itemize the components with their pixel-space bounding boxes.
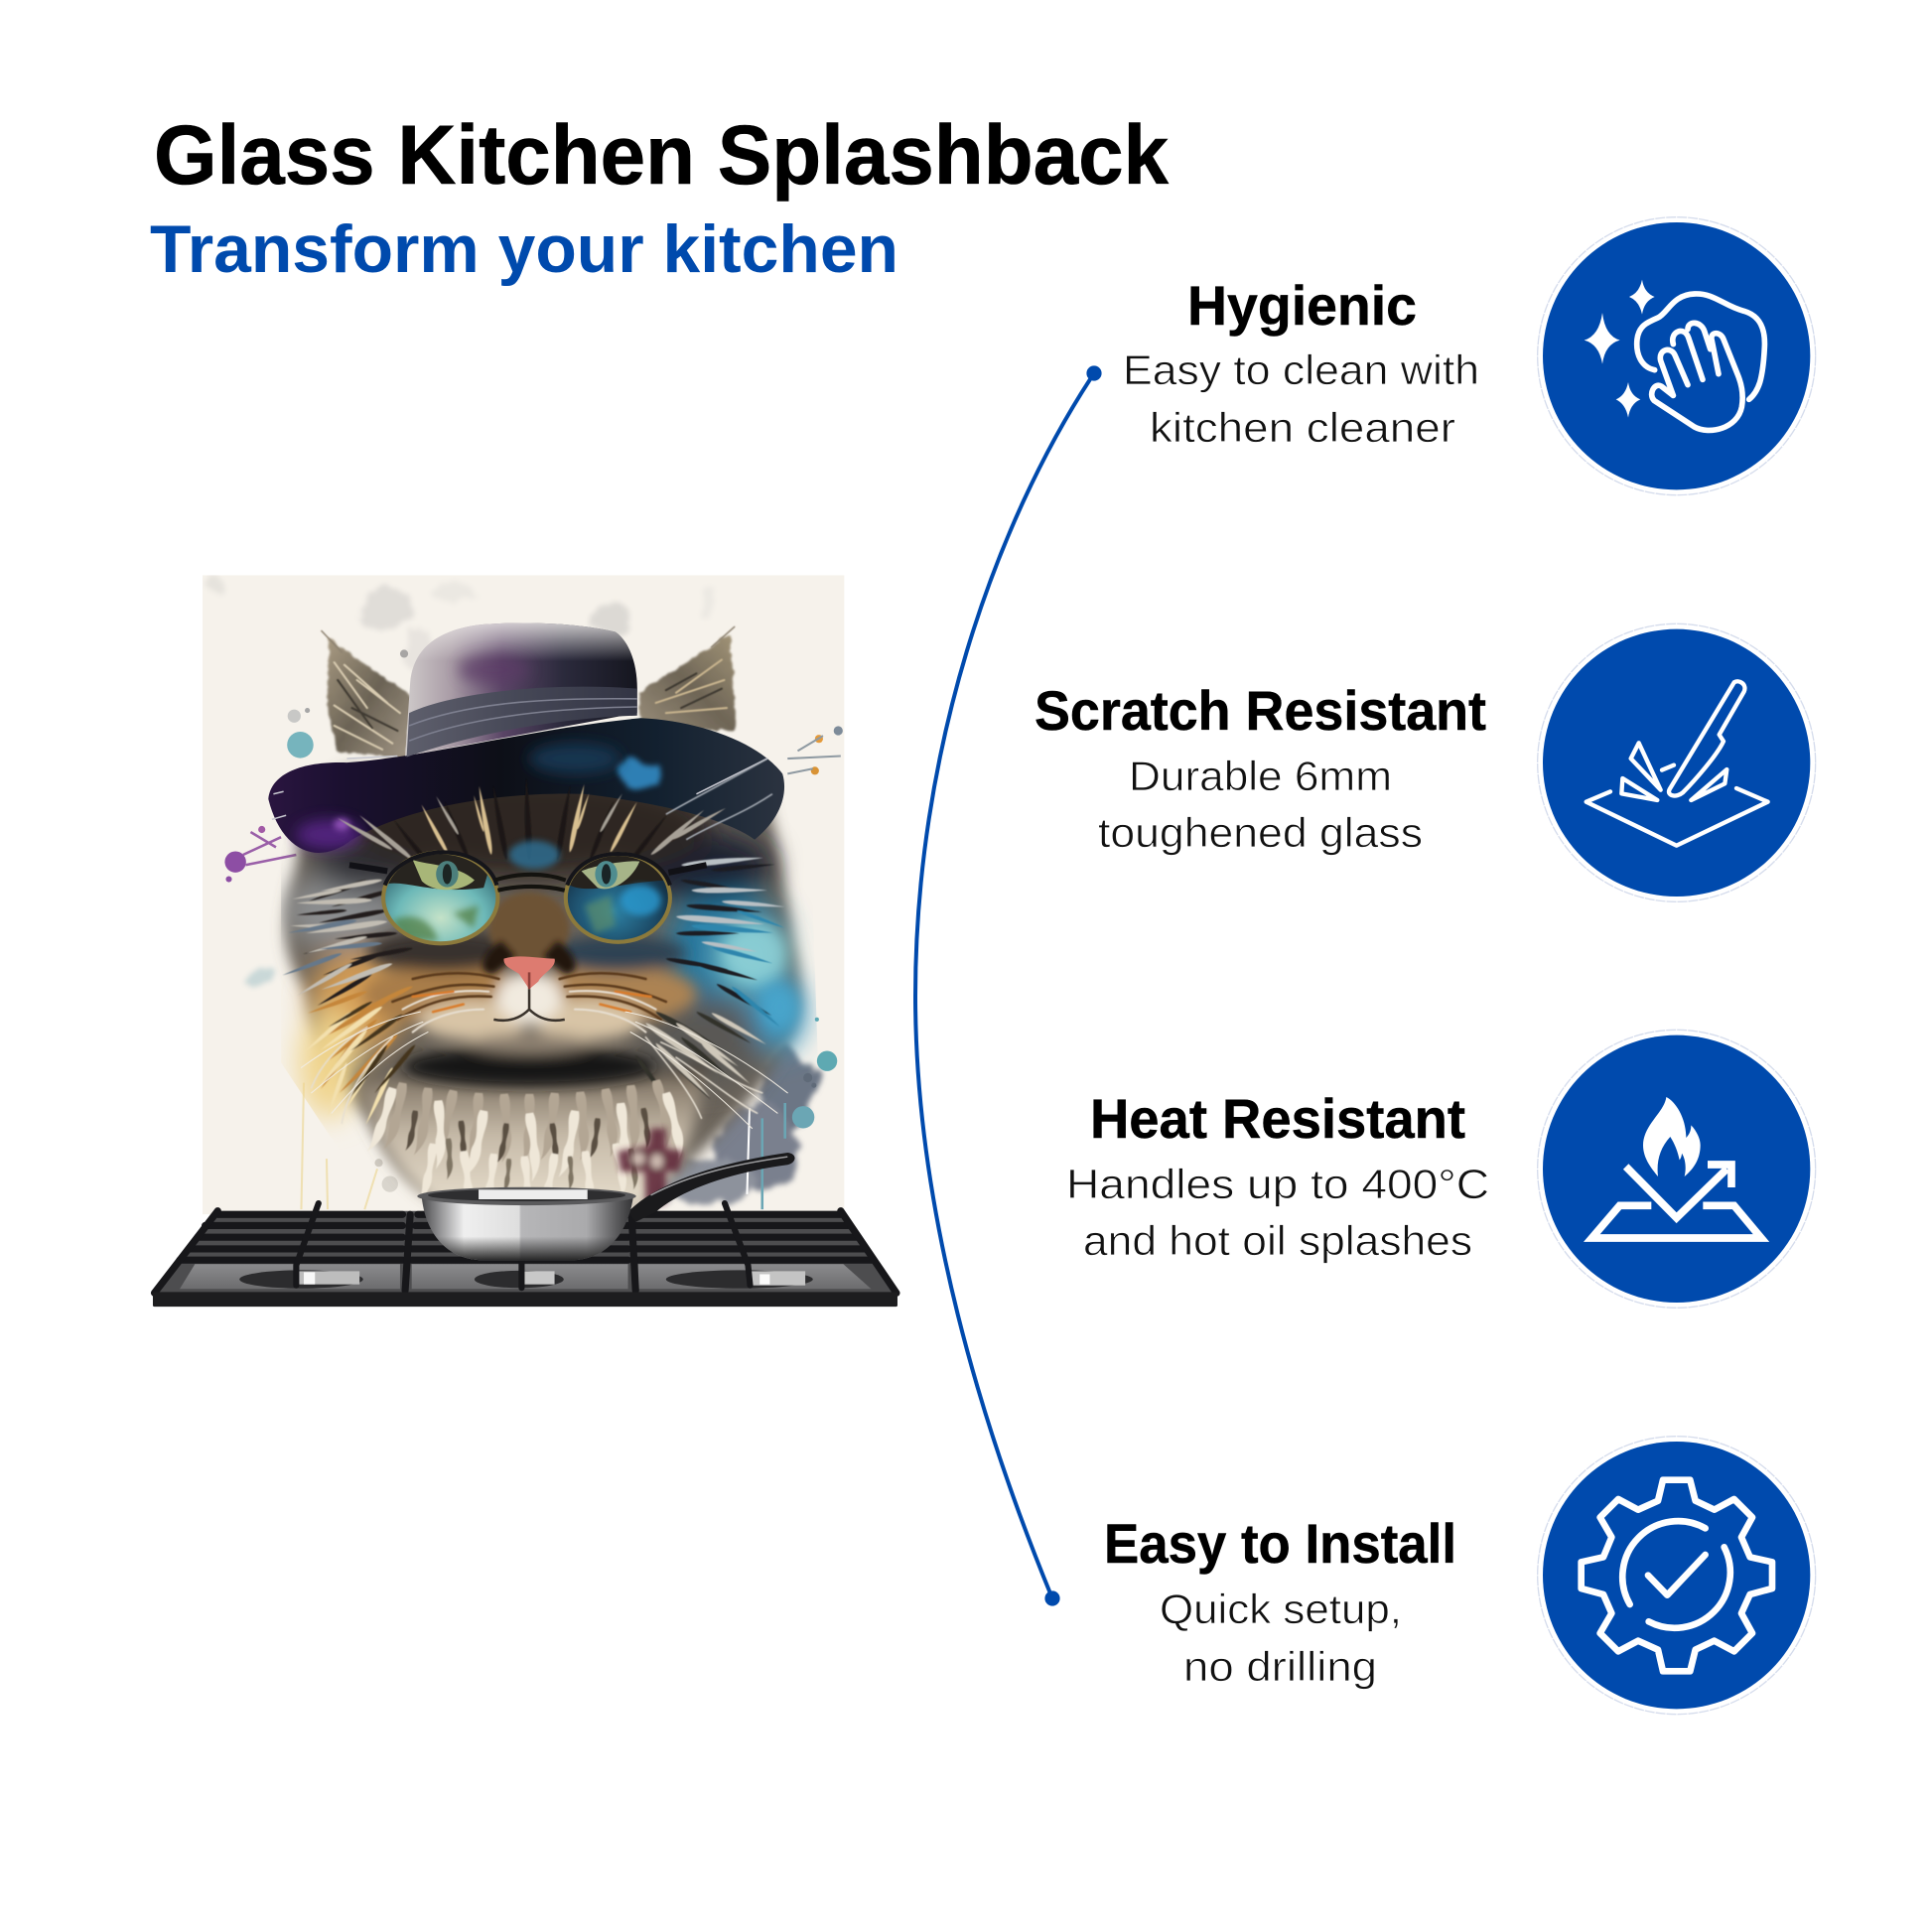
- fine whisker hairs on chest: [312, 1027, 762, 1123]
- whiskers: [301, 1012, 787, 1129]
- title: Glass Kitchen Splashback: [154, 108, 1169, 202]
- glasses frame: [349, 852, 707, 943]
- description line 2: toughened glass: [1098, 809, 1423, 856]
- burner wells: [180, 1264, 871, 1289]
- hat crown: [405, 622, 637, 757]
- hob surface: [152, 1211, 897, 1295]
- fur strands: chest locks: [368, 1078, 684, 1193]
- cat ears: [328, 634, 735, 759]
- description line 2: and hot oil splashes: [1083, 1217, 1472, 1264]
- description line 1: Quick setup,: [1160, 1586, 1402, 1632]
- description line 1: Easy to clean with: [1123, 346, 1479, 393]
- icon: hand wiping with sparkles: [1538, 217, 1816, 495]
- feature: Easy to Install: [1104, 1437, 1816, 1715]
- cast iron grates: [155, 1203, 897, 1293]
- muzzle and chin: [362, 892, 696, 1087]
- paint splatters: [224, 649, 843, 1209]
- left lens: [382, 852, 497, 943]
- heading: Heat Resistant: [1090, 1087, 1465, 1150]
- feature: Scratch Resistant: [1035, 623, 1816, 901]
- icon: knife scratching glass: [1538, 623, 1816, 901]
- ear fur strokes: [322, 626, 735, 750]
- heading: Hygienic: [1187, 274, 1417, 337]
- fur strands: muzzle stripes: [392, 973, 666, 1033]
- arrow: connector curve with end dots: [915, 365, 1102, 1606]
- hat brim: [268, 718, 784, 853]
- feature: Heat Resistant: [1066, 1030, 1816, 1308]
- description line 1: Durable 6mm: [1129, 753, 1392, 799]
- maroon drip: [618, 1129, 684, 1204]
- forehead tabby fur: [337, 759, 772, 872]
- splashback artwork panel: [203, 575, 844, 1214]
- frying pan: [417, 1153, 795, 1260]
- heading: Easy to Install: [1104, 1512, 1456, 1575]
- hat band: [407, 687, 637, 758]
- fur strands: left cheek: [282, 878, 417, 1126]
- product image: cat splashback behind gas hob: [152, 575, 897, 1307]
- right lens: [568, 856, 668, 940]
- watercolor washes: [206, 577, 815, 1207]
- cat fur body: [284, 768, 805, 1208]
- subtitle: Transform your kitchen: [150, 211, 898, 287]
- gas hob: [152, 1203, 897, 1307]
- description line 2: no drilling: [1183, 1643, 1377, 1690]
- icon: flame reflecting off surface: [1538, 1030, 1816, 1308]
- pan rim: [417, 1187, 636, 1205]
- icon: gear with check mark: [1538, 1437, 1816, 1715]
- fur strands: right cheek: [633, 855, 785, 1108]
- heading: Scratch Resistant: [1035, 679, 1486, 742]
- burners: [239, 1270, 813, 1289]
- hob front edge: [153, 1292, 897, 1307]
- feature: Hygienic: [1123, 217, 1816, 495]
- cat nose and mouth: [493, 956, 565, 1021]
- cat eyes and glasses: [349, 852, 707, 943]
- pan bowl: [422, 1198, 633, 1260]
- description line 2: kitchen cleaner: [1150, 404, 1455, 451]
- description line 1: Handles up to 400°C: [1066, 1161, 1489, 1207]
- pan handle: [628, 1153, 795, 1222]
